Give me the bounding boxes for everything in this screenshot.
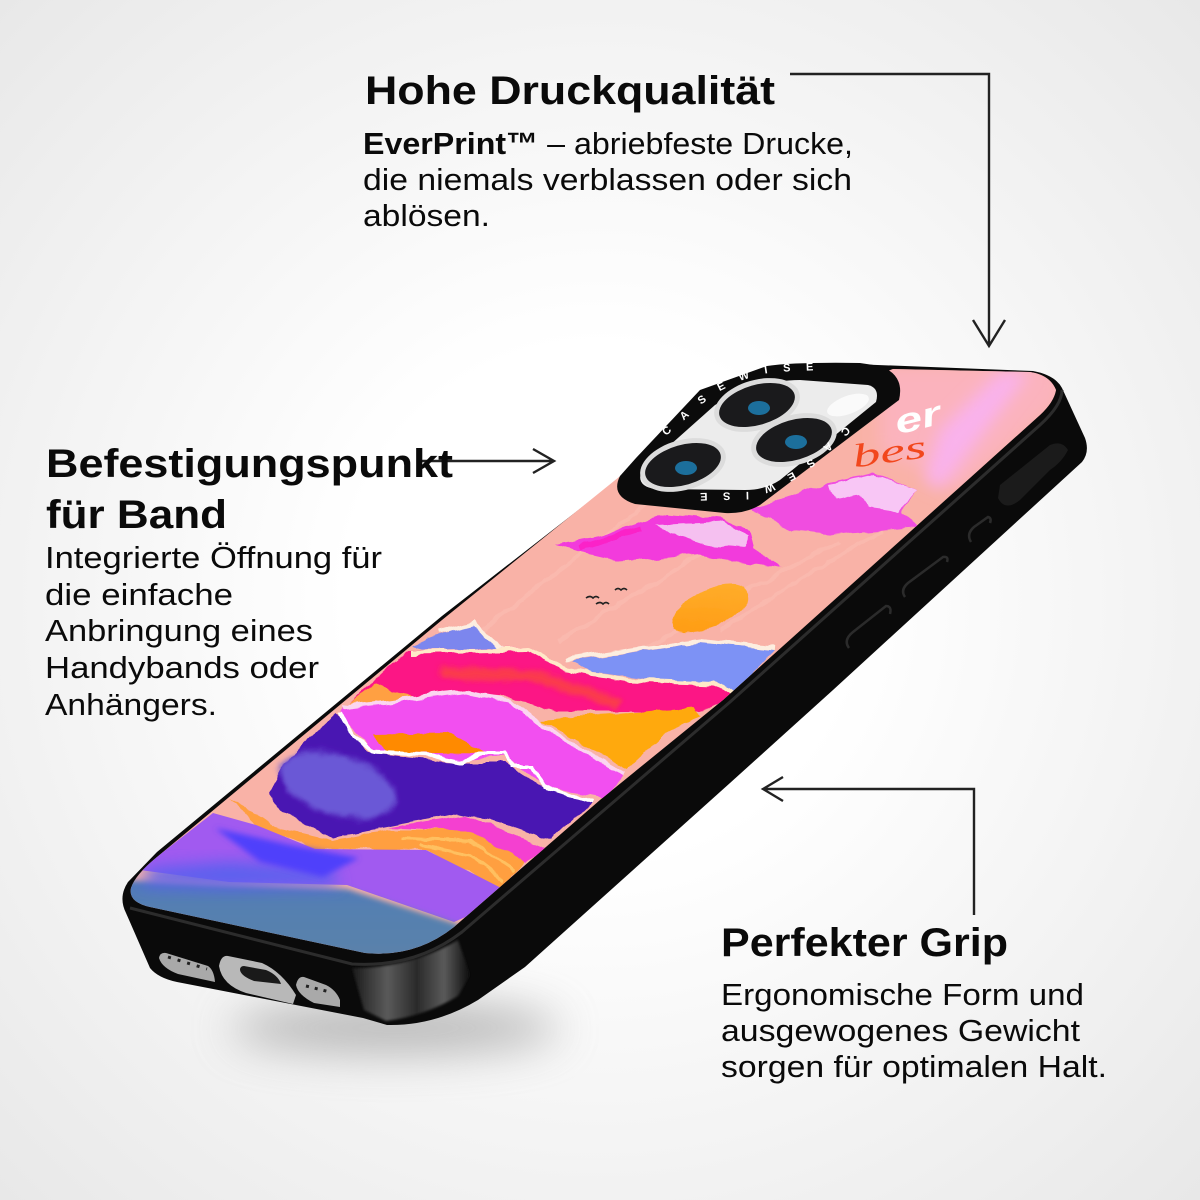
inner rim highlight <box>130 390 1062 964</box>
case body <box>122 363 1087 1025</box>
body: grip: sorgen für optimalen Halt. <box>721 1049 1107 1084</box>
lens left <box>634 429 732 501</box>
orange left sliver <box>350 684 413 705</box>
lens top <box>708 369 806 441</box>
body: strap attachment <box>45 540 382 722</box>
mountain right blue <box>570 642 775 692</box>
printed artwork <box>130 369 1056 954</box>
orange waves <box>229 800 525 890</box>
phone shadow <box>230 1002 560 1054</box>
mountain right pink line <box>565 640 775 660</box>
lower violet <box>140 813 505 922</box>
top lilac streak <box>925 372 1030 490</box>
body: strap attachment: Integrierte Öffnung für <box>45 540 382 575</box>
body: grip: Ergonomische Form und <box>721 977 1084 1012</box>
yellow wave lines <box>400 838 515 882</box>
body: print quality: die niemals verblassen oder sich <box>363 162 852 197</box>
body: grip <box>721 977 1107 1084</box>
orange script word: bes <box>850 429 929 475</box>
charging port <box>219 956 296 1004</box>
heading: strap attachment <box>46 442 453 537</box>
body: print quality <box>363 126 853 233</box>
arrow: strap attachment <box>420 449 554 473</box>
camera plate <box>640 380 877 490</box>
magenta strokes <box>387 815 549 862</box>
text block: print quality <box>363 69 853 233</box>
heading: print quality: Hohe Druckqualität <box>365 69 775 113</box>
top pink area <box>880 366 1060 490</box>
blue violet patch <box>215 828 359 877</box>
text block: strap attachment <box>45 442 453 722</box>
soft blue field <box>130 876 460 954</box>
birds <box>586 588 627 604</box>
side button: action <box>847 606 890 648</box>
side button: small <box>969 517 991 542</box>
bumper corner reflection <box>352 940 470 1021</box>
pastel strokes <box>676 590 746 631</box>
body: grip: ausgewogenes Gewicht <box>721 1013 1080 1048</box>
body: print quality: EverPrint™ – abriebfeste Drucke, <box>363 126 853 161</box>
body: strap attachment: Anbringung eines <box>45 613 313 648</box>
camera control bump <box>998 443 1068 506</box>
heading: strap attachment: Befestigungspunkt <box>46 442 453 486</box>
body: strap attachment: Anhängers. <box>45 687 217 722</box>
flash <box>824 389 872 421</box>
peach base <box>130 369 1056 954</box>
mountain back blue <box>412 622 502 656</box>
orange inner band <box>371 732 485 753</box>
body: strap attachment: die einfache <box>45 577 233 612</box>
white jagged line <box>340 712 592 802</box>
body: print quality: ablösen. <box>363 198 490 233</box>
heading: grip: Perfekter Grip <box>721 921 1008 965</box>
arrow: grip <box>763 777 974 915</box>
cloud right <box>750 473 920 534</box>
arrow: print quality <box>790 74 1005 346</box>
ring lettering top: CASEWISE <box>662 363 813 434</box>
red magenta ridge <box>345 648 735 712</box>
painted art layers <box>229 473 920 890</box>
white word on art: er <box>891 394 947 442</box>
camera ring <box>617 363 900 513</box>
camera island <box>617 362 900 514</box>
ring lettering bottom: CASEWISE <box>700 428 850 501</box>
speaker left <box>159 953 215 982</box>
heading: strap attachment: für Band <box>46 493 227 537</box>
speaker right <box>296 977 340 1007</box>
sun <box>672 583 748 634</box>
phone case <box>122 363 1087 1025</box>
orange right field <box>540 708 700 768</box>
magenta ridge <box>339 692 624 798</box>
cloud left <box>556 513 782 568</box>
side button: volume <box>903 557 948 597</box>
text block: grip <box>721 921 1107 1084</box>
lens right <box>745 404 843 476</box>
body: strap attachment: Handybands oder <box>45 650 319 685</box>
indigo haze <box>140 862 340 888</box>
dark purple mountain <box>268 713 592 840</box>
light purple patch <box>274 747 398 824</box>
